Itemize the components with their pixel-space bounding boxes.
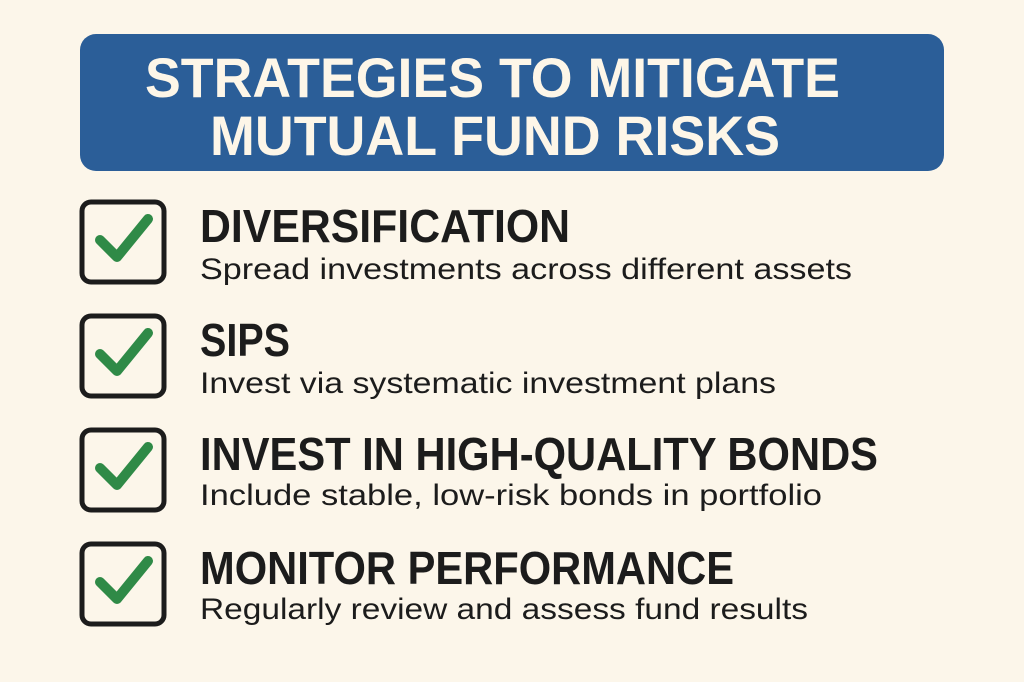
- heading: MONITOR PERFORMANCE: [200, 542, 734, 594]
- title text: [145, 46, 840, 167]
- heading: DIVERSIFICATION: [200, 200, 570, 252]
- title banner: [80, 34, 944, 171]
- icon: checkbox: [82, 202, 164, 282]
- icon: checkbox: [82, 544, 164, 624]
- description: Invest via systematic investment plans: [200, 367, 776, 400]
- heading: INVEST IN HIGH-QUALITY BONDS: [200, 428, 878, 480]
- icon: checkbox: [82, 316, 164, 396]
- description: Spread investments across different assets: [200, 253, 852, 286]
- item: diversification: [82, 200, 852, 286]
- description: Include stable, low-risk bonds in portfolio: [200, 479, 822, 512]
- item: monitor: [82, 542, 808, 626]
- heading: SIPS: [200, 314, 290, 366]
- item: SIPs: [82, 314, 776, 400]
- item: bonds: [82, 428, 878, 512]
- description: Regularly review and assess fund results: [200, 593, 808, 626]
- title text: STRATEGIES TO MITIGATE: [145, 46, 840, 109]
- title text: MUTUAL FUND RISKS: [210, 104, 780, 167]
- icon: checkbox: [82, 430, 164, 510]
